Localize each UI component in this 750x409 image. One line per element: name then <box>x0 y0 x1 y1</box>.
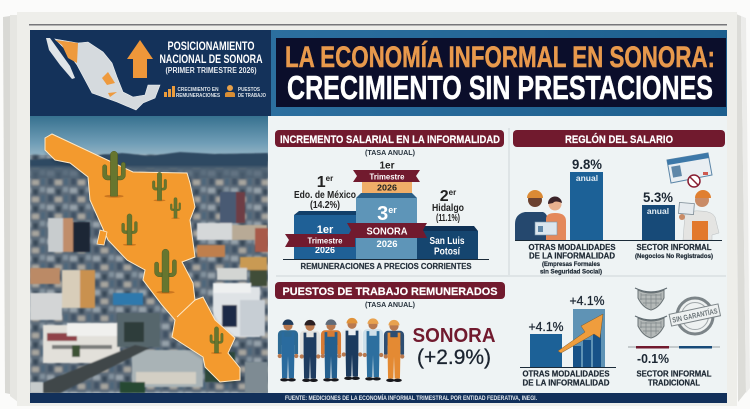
footer source bar: FUENTE: MEDICIONES DE LA ECONOMÍA INFORMAL TRIMESTRAL POR ENTIDAD FEDERATIVA, INEGI. <box>285 394 537 402</box>
legend: remuneraciones <box>164 86 220 99</box>
top podium label: 1er <box>379 160 395 172</box>
subtitle: (TASA ANUAL) <box>365 150 415 157</box>
podium bar: Sonora <box>356 193 417 259</box>
label: otras modalidades: DE LA INFORMALIDAD <box>529 252 615 260</box>
stat: Sonora +2.9%: SONORA <box>412 324 496 347</box>
podium bar: Edo. de México <box>294 211 356 259</box>
heading: incremento salarial <box>275 130 504 147</box>
label: Hidalgo: 2 <box>440 188 449 205</box>
icon: empty pockets <box>635 288 667 338</box>
label: sector informal tradicional <box>636 370 712 388</box>
label: Edo. de México: (14.2%) <box>310 200 340 211</box>
panel: content background <box>30 116 727 393</box>
label: sector informal <box>635 243 713 260</box>
label: sector informal: (Negocios No Registrados) <box>635 254 713 260</box>
footer source bar <box>30 393 727 403</box>
legend: puestos de trabajo <box>225 85 267 99</box>
panel: puestos de trabajo <box>275 282 505 382</box>
label: otras modalidades: DE LA INFORMALIDAD <box>522 378 610 388</box>
label: sector informal: SECTOR INFORMAL <box>636 243 712 252</box>
bar: otras modalidades 9.8%: 9.8% <box>572 156 603 172</box>
label: Edo. de México: er <box>326 174 333 183</box>
label: Hidalgo: (11.1%) <box>436 213 460 224</box>
legend: remuneraciones: REMUNERACIONES <box>176 93 220 99</box>
flat line indicator <box>628 346 720 348</box>
label: otras modalidades: OTRAS MODALIDADES <box>528 243 616 252</box>
heading: reglón del salario: REGLÓN DEL SALARIO <box>565 133 673 146</box>
bar: otras modalidades 9.8% <box>570 156 603 240</box>
icon: informal worker <box>679 190 719 240</box>
top podium label <box>353 160 420 193</box>
icon: cacti <box>103 151 223 354</box>
icon: six workers <box>278 318 404 382</box>
bar: +4.1%: +4.1% <box>528 319 564 334</box>
note: remuneraciones: REMUNERACIONES A PRECIOS CORRIENTES <box>300 262 472 271</box>
stamp: sin garantías: SIN GARANTÍAS <box>671 306 718 325</box>
label: otras modalidades <box>522 370 610 388</box>
legend: puestos de trabajo: DE TRABAJO <box>238 93 267 99</box>
baseline <box>515 240 722 241</box>
bar: sector informal 5.3%: 5.3% <box>643 189 674 205</box>
ribbon: Sonora: SONORA <box>366 226 408 238</box>
ribbon: primer trimestre: Trimestre <box>308 236 343 246</box>
top podium label: 2026 <box>377 182 397 192</box>
label: otras modalidades: OTRAS MODALIDADES <box>522 370 610 378</box>
label: Hidalgo: er <box>449 188 456 197</box>
icon: ID card with prohibition <box>667 153 712 187</box>
heading: reglón del salario <box>513 130 725 147</box>
panel: salary increase podium <box>275 130 504 271</box>
podium bar: Edo. de México: 1er <box>317 224 334 236</box>
arrow: growth <box>558 314 603 353</box>
position heading: POSICIONAMIENTO <box>168 39 254 53</box>
podium bar: Edo. de México: 2026 <box>315 245 335 255</box>
top podium label: Trimestre <box>370 172 405 182</box>
label: Edo. de México: Edo. de México <box>294 190 356 201</box>
panel: reglón del salario <box>513 130 725 276</box>
icon: up arrow <box>127 40 153 78</box>
map of Sonora and Sinaloa <box>45 134 241 384</box>
podium bar: Sonora: 3 <box>377 203 388 225</box>
chart: otras modalidades growth <box>520 293 616 388</box>
subtitle: (TASA ANUAL) <box>365 302 415 309</box>
heading: puestos de trabajo: PUESTOS DE TRABAJO REMUNERADOS <box>282 286 498 298</box>
label: otras modalidades <box>528 243 616 276</box>
icon: couple with ID card <box>515 190 566 240</box>
podium bar: Sonora: 2026 <box>376 239 398 249</box>
stat: -0.1%: -0.1% <box>637 351 669 366</box>
position heading: (PRIMER TRIMESTRE 2026) <box>166 66 257 75</box>
legend: remuneraciones: CRECIMIENTO EN <box>178 87 219 93</box>
podium bar: San Luis Potosí: San Luis <box>430 236 465 247</box>
decorative dividers <box>276 128 726 276</box>
label: sector informal tradicional: TRADICIONAL <box>648 378 700 388</box>
bar: otras modalidades 9.8%: anual <box>576 173 598 183</box>
label: Hidalgo: Hidalgo <box>432 203 464 214</box>
map of Mexico <box>46 38 160 110</box>
title banner <box>271 30 727 116</box>
heading: puestos de trabajo <box>275 282 505 299</box>
position heading: NACIONAL DE SONORA <box>160 52 263 66</box>
heading: incremento salarial: INCREMENTO SALARIAL EN LA INFORMALIDAD <box>280 134 500 146</box>
chart: sector informal tradicional <box>628 288 720 388</box>
legend: puestos de trabajo: PUESTOS <box>238 87 260 93</box>
ribbon: primer trimestre <box>285 234 355 247</box>
podium bar: San Luis Potosí: Potosí <box>434 246 461 258</box>
bar: sector informal 5.3% <box>642 189 675 240</box>
bar: +4.1% with growth bars: +4.1% <box>570 293 605 308</box>
bar: sector informal 5.3%: anual <box>647 206 669 216</box>
podium bar: Sonora: er <box>388 205 397 215</box>
panel: national position header <box>30 30 271 116</box>
label: Edo. de México <box>294 174 356 211</box>
label: sector informal tradicional: SECTOR INFORMAL <box>636 370 712 378</box>
baseline <box>283 259 489 260</box>
label: Edo. de México: 1 <box>317 174 326 191</box>
label: Hidalgo <box>432 188 464 224</box>
stat: Sonora +2.9% <box>412 324 496 369</box>
stat: Sonora +2.9%: (+2.9%) <box>417 346 491 369</box>
label: otras modalidades: (Empresas Formales <box>542 262 601 268</box>
baseline <box>520 367 616 368</box>
ribbon: Sonora <box>347 223 427 238</box>
label: otras modalidades: sin Seguridad Social) <box>540 270 602 276</box>
panel: city photo background <box>30 116 268 393</box>
podium bar: San Luis Potosí <box>417 226 478 259</box>
position heading <box>160 39 263 75</box>
